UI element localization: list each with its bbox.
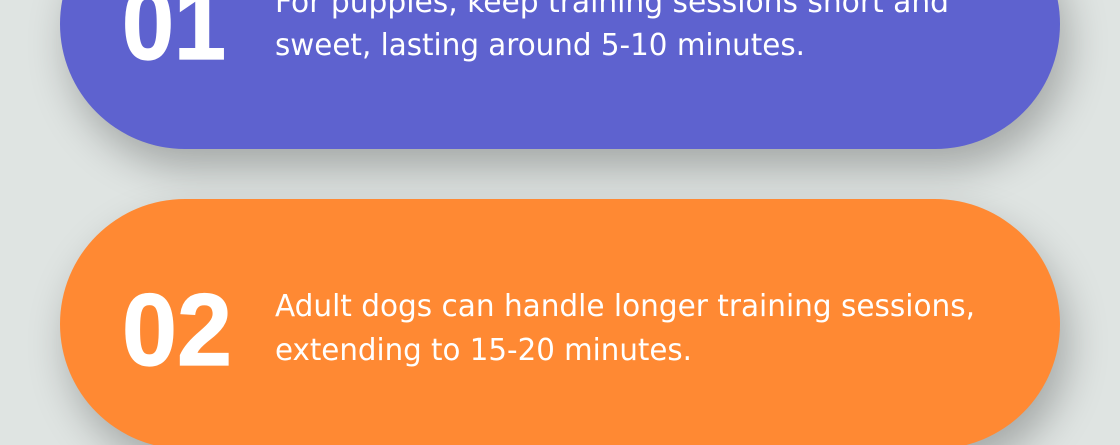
text: puppies bbox=[275, 0, 949, 63]
panel: card 01 background bbox=[60, 0, 1060, 149]
card 02 content bbox=[122, 273, 975, 387]
text: adult dogs: Adult dogs can handle longer training sessions, bbox=[275, 289, 975, 324]
panel: card 02 background bbox=[60, 199, 1060, 445]
number 02: 02 bbox=[122, 273, 232, 387]
card 01 content bbox=[122, 0, 949, 81]
text: puppies: sweet, lasting around 5-10 minutes. bbox=[275, 28, 805, 63]
text: adult dogs: extending to 15-20 minutes. bbox=[275, 333, 692, 368]
text: adult dogs bbox=[275, 289, 975, 368]
